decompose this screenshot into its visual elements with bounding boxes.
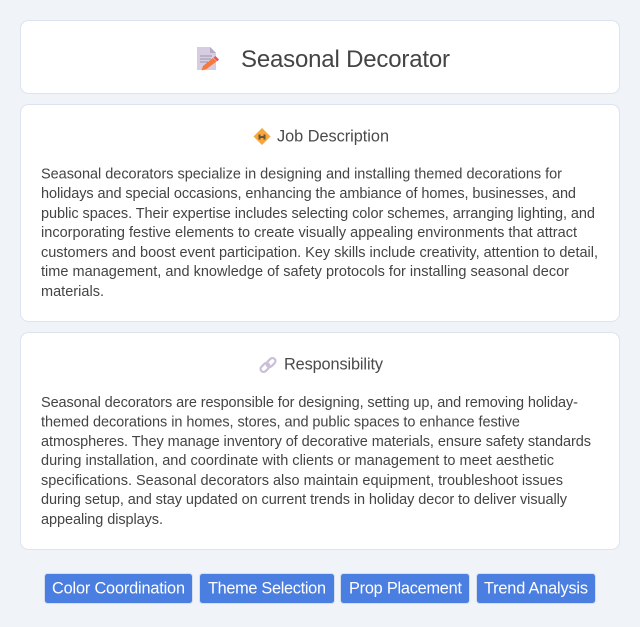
text block: job description: materials. [41, 284, 104, 300]
text block: responsibility: Seasonal decorators are responsible for designing, setting up, and removing holiday- [41, 395, 578, 411]
text block: job description: holidays and special occasions, enhancing the ambiance of homes, businesses, and [41, 186, 576, 202]
tag: Color Coordination: Color Coordination [52, 580, 185, 598]
heading: Responsibility: Responsibility [284, 356, 384, 374]
text block: responsibility: atmospheres. They manage inventory of decorative materials, ensure safety standards [41, 434, 591, 450]
icon: chain link [259, 357, 277, 373]
text block: job description: Seasonal decorators specialize in designing and installing themed decorations for [41, 166, 562, 182]
text block: responsibility: themed decorations in homes, stores, and public spaces to enhance festive [41, 414, 520, 430]
text block: responsibility: during setup, and stay updated on current trends in holiday decor to deliver visually [41, 492, 568, 508]
text block: job description [41, 166, 598, 300]
text block: job description: public spaces. Their expertise includes selecting color schemes, arranging lighting, and [41, 206, 595, 222]
tag: Prop Placement [340, 574, 470, 604]
panel: responsibility [20, 332, 620, 550]
tag: Theme Selection [200, 574, 334, 604]
panel: title [20, 20, 620, 94]
tag: Prop Placement: Prop Placement [349, 580, 462, 598]
text block: responsibility: specifications. Seasonal decorators also maintain equipment, troubleshoot issues [41, 473, 563, 489]
tag: Theme Selection: Theme Selection [208, 580, 326, 598]
text block: job description: incorporating festive elements to create visually appealing environments that attract [41, 225, 577, 241]
tag: Trend Analysis [476, 574, 596, 604]
text block: responsibility: during installation, and coordinate with clients or management to meet aesthetic [41, 453, 554, 469]
heading: Job Description: Job Description [277, 128, 389, 146]
icon: orange diamond [254, 128, 270, 145]
heading: Seasonal Decorator: Seasonal Decorator [241, 46, 450, 73]
text block: responsibility: appealing displays. [41, 512, 163, 528]
text block: responsibility [41, 395, 591, 528]
panel: job description [20, 104, 620, 322]
text block: job description: customers and boost event participation. Key skills include creativity, attention to detail, [41, 245, 598, 261]
tag: Trend Analysis: Trend Analysis [484, 580, 588, 598]
tag: Color Coordination [44, 574, 192, 604]
icon: document with pencil [197, 47, 219, 70]
text block: job description: time management, and knowledge of safety protocols for installing seasonal decor [41, 264, 569, 280]
